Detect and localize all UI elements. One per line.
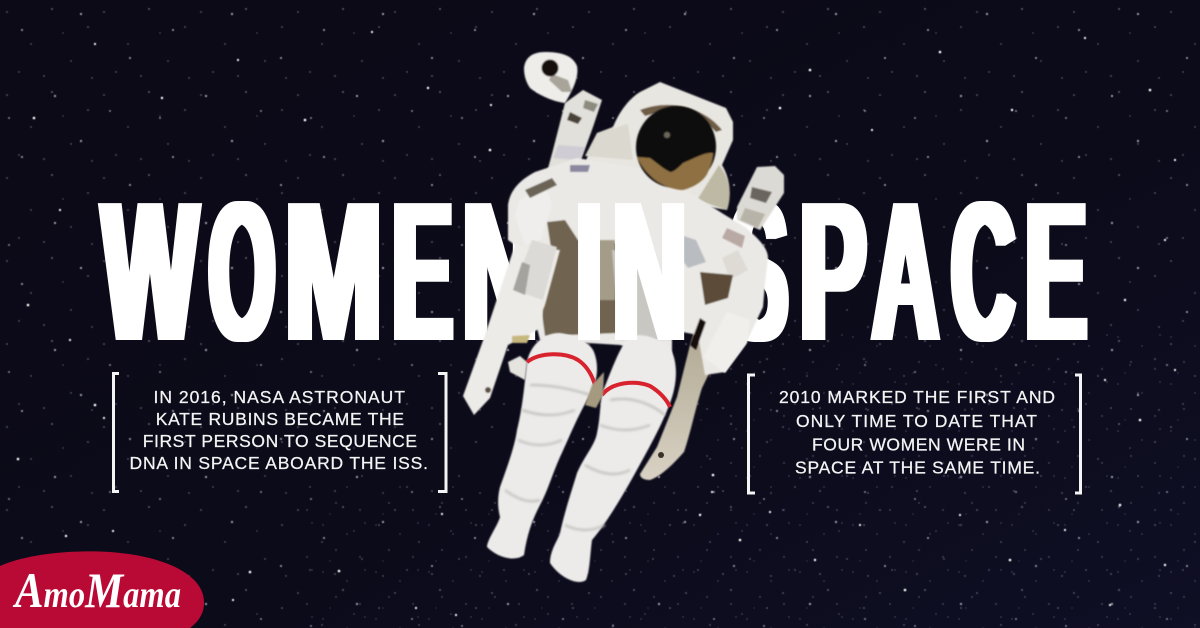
right thigh red band: [602, 383, 670, 407]
left thigh red band: [527, 354, 595, 385]
panel: left fact: [114, 374, 446, 492]
title word: WOMEN: W: [102, 161, 198, 383]
title word: WOMEN: [102, 160, 538, 383]
panel: right fact: [748, 375, 1080, 493]
helmet shell: [583, 82, 733, 210]
astronaut illustration: [463, 52, 784, 582]
right forearm box: [703, 312, 750, 373]
right leg: [550, 335, 676, 582]
left bracket: [114, 374, 119, 492]
title word: SPACE: S: [730, 160, 788, 383]
fact text: [130, 387, 428, 473]
fact text: IN 2016, NASA ASTRONAUT: [154, 387, 405, 407]
title word: IN: I: [576, 160, 602, 383]
right bracket: [438, 374, 446, 492]
title word: SPACE: P: [800, 162, 866, 383]
right glove: [737, 166, 784, 230]
fact text: ONLY TIME TO DATE THAT: [796, 411, 1037, 431]
title word: SPACE: A: [872, 160, 938, 382]
torso and arms: [508, 158, 768, 375]
helmet visor: [628, 99, 724, 195]
left control box: [463, 240, 560, 415]
fact text: FIRST PERSON TO SEQUENCE: [143, 431, 417, 451]
title word: WOMEN: O: [209, 162, 275, 383]
fact text: FOUR WOMEN WERE IN: [812, 434, 1025, 454]
title word: WOMEN: N: [462, 160, 538, 383]
crotch detail: [585, 372, 604, 408]
badge shape: [0, 551, 204, 628]
title word: SPACE: E: [1025, 160, 1087, 382]
title word: SPACE: C: [952, 160, 1015, 383]
logo wordmark: AmoMama: [12, 562, 181, 618]
right bracket: [1075, 375, 1080, 493]
left leg: [487, 333, 597, 558]
rail bolt: [658, 452, 664, 458]
title word: IN: N: [613, 160, 687, 383]
fact text: KATE RUBINS BECAME THE: [156, 409, 404, 429]
fact text: DNA IN SPACE ABOARD THE ISS.: [130, 453, 428, 473]
title word: SPACE: [730, 160, 1087, 383]
fact text: SPACE AT THE SAME TIME.: [795, 458, 1040, 478]
fact text: 2010 MARKED THE FIRST AND: [779, 387, 1055, 407]
camera pod: [524, 52, 577, 103]
logo badge: [0, 551, 204, 628]
fact text: [779, 387, 1055, 478]
title word: WOMEN: M: [285, 160, 382, 383]
tower arm: [547, 90, 602, 172]
title word: WOMEN: E: [392, 160, 452, 383]
title word: IN: [576, 160, 687, 383]
left bracket: [748, 375, 755, 493]
MMU right rail: [640, 305, 735, 480]
